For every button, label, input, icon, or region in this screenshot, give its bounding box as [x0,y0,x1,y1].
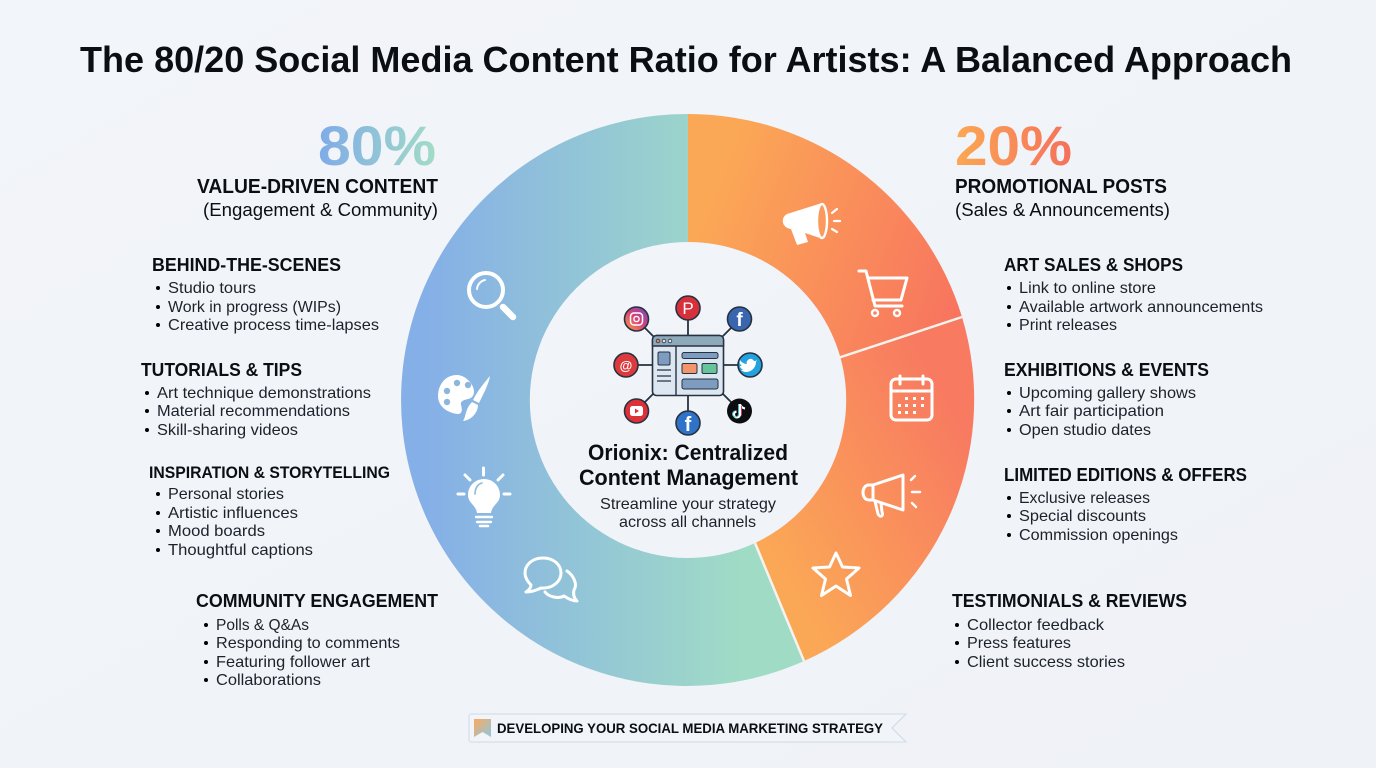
list: limited editions and offers: LIMITED EDITIONS & OFFERS [1004,465,1247,485]
list: inspiration and storytelling: INSPIRATION & STORYTELLING [149,463,390,482]
icon: red network: @ [620,358,632,373]
20% heading: PROMOTIONAL POSTS [955,176,1167,198]
donut chart [401,114,974,686]
icon: outline megaphone [863,475,920,516]
icon: star [813,553,859,596]
list: inspiration and storytelling: Mood boards [168,523,265,540]
20% heading: 20% [955,114,1072,177]
icon: pinterest [676,296,700,320]
list: tutorials and tips: TUTORIALS & TIPS [141,360,302,380]
list: community engagement [196,591,438,689]
list: testimonials and reviews: Client success stories [967,654,1125,671]
icon: light bulb [458,468,510,526]
list: behind-the-scenes: Work in progress (WIPs) [168,299,341,316]
list: exhibitions and events: EXHIBITIONS & EVENTS [1004,360,1209,380]
list: limited editions and offers [1004,465,1247,544]
list: community engagement: COMMUNITY ENGAGEMENT [196,591,438,611]
center subtext: Streamline your strategy [600,496,776,513]
list: exhibitions and events: Open studio dates [1019,422,1151,439]
icon: magnifier [469,273,513,317]
icon: chat bubbles [525,558,577,601]
icon: ribbon [474,719,491,737]
list: tutorials and tips: Skill-sharing videos [157,422,298,439]
list: art sales and shops: ART SALES & SHOPS [1004,255,1183,275]
list: testimonials and reviews [952,591,1187,671]
footer banner: DEVELOPING YOUR SOCIAL MEDIA MARKETING STRATEGY [497,720,884,736]
list: inspiration and storytelling: Artistic influences [168,505,298,522]
80% heading [197,114,438,220]
list: limited editions and offers: Exclusive releases [1019,490,1150,507]
footer banner [469,714,906,742]
80% heading: 80% [318,114,436,177]
center subtext [600,496,776,531]
center heading [579,440,799,490]
center hub: social network diagram [614,296,762,436]
browser window [652,336,724,396]
list: exhibitions and events [1004,360,1209,439]
list: testimonials and reviews: TESTIMONIALS & REVIEWS [952,591,1187,611]
list: tutorials and tips [141,360,371,439]
list: community engagement: Responding to comments [216,635,400,652]
list: behind-the-scenes: Studio tours [168,280,256,297]
icon: red network [614,353,638,377]
segment: other promotional [755,317,974,661]
list: tutorials and tips: Material recommendations [157,403,350,420]
list: testimonials and reviews: Press features [967,635,1071,652]
list: art sales and shops: Link to online store [1019,280,1156,297]
icon: tiktok [727,398,752,424]
20% heading: (Sales & Announcements) [955,200,1170,220]
list: behind-the-scenes [152,255,379,334]
center subtext: across all channels [619,514,756,531]
icon: twitter [738,353,762,377]
list: inspiration and storytelling: Personal stories [168,486,284,503]
icon: calendar [891,376,932,420]
center heading: Orionix: Centralized [588,440,788,465]
list: community engagement: Polls & Q&As [216,617,309,634]
list: community engagement: Collaborations [216,672,321,689]
segment: art sales promotional [688,114,962,356]
icon: filled megaphone [783,203,840,245]
list: behind-the-scenes: Creative process time-lapses [168,317,379,334]
list: art sales and shops [1004,255,1263,334]
icon: facebook bottom [676,411,700,436]
icon: pinterest: P [682,299,694,318]
icon: shopping cart [859,271,907,316]
center heading: Content Management [579,465,799,490]
80% heading: VALUE-DRIVEN CONTENT [197,176,438,198]
list: limited editions and offers: Special discounts [1019,508,1146,525]
title: The 80/20 Social Media Content Ratio for Artists: A Balanced Approach [80,39,1292,80]
list: tutorials and tips: Art technique demonstrations [157,385,371,402]
list: art sales and shops: Print releases [1019,317,1117,334]
list: inspiration and storytelling [149,463,390,559]
list: exhibitions and events: Art fair participation [1019,403,1164,420]
list: exhibitions and events: Upcoming gallery shows [1019,385,1196,402]
list: community engagement: Featuring follower art [216,654,371,671]
list: testimonials and reviews: Collector feedback [967,617,1105,634]
list: limited editions and offers: Commission openings [1019,527,1178,544]
80% heading: (Engagement & Community) [203,200,438,220]
icon: facebook top [728,307,752,331]
icon: palette [438,375,490,421]
segment: 80% value-driven [401,114,804,686]
icon: facebook top: f [736,310,743,331]
list: inspiration and storytelling: Thoughtful captions [168,542,313,559]
icon: youtube [624,399,648,423]
icon: facebook bottom: f [685,414,692,436]
20% heading [955,114,1170,220]
icon: instagram [624,307,648,331]
list: art sales and shops: Available artwork announcements [1019,299,1263,316]
list: behind-the-scenes: BEHIND-THE-SCENES [152,255,341,275]
